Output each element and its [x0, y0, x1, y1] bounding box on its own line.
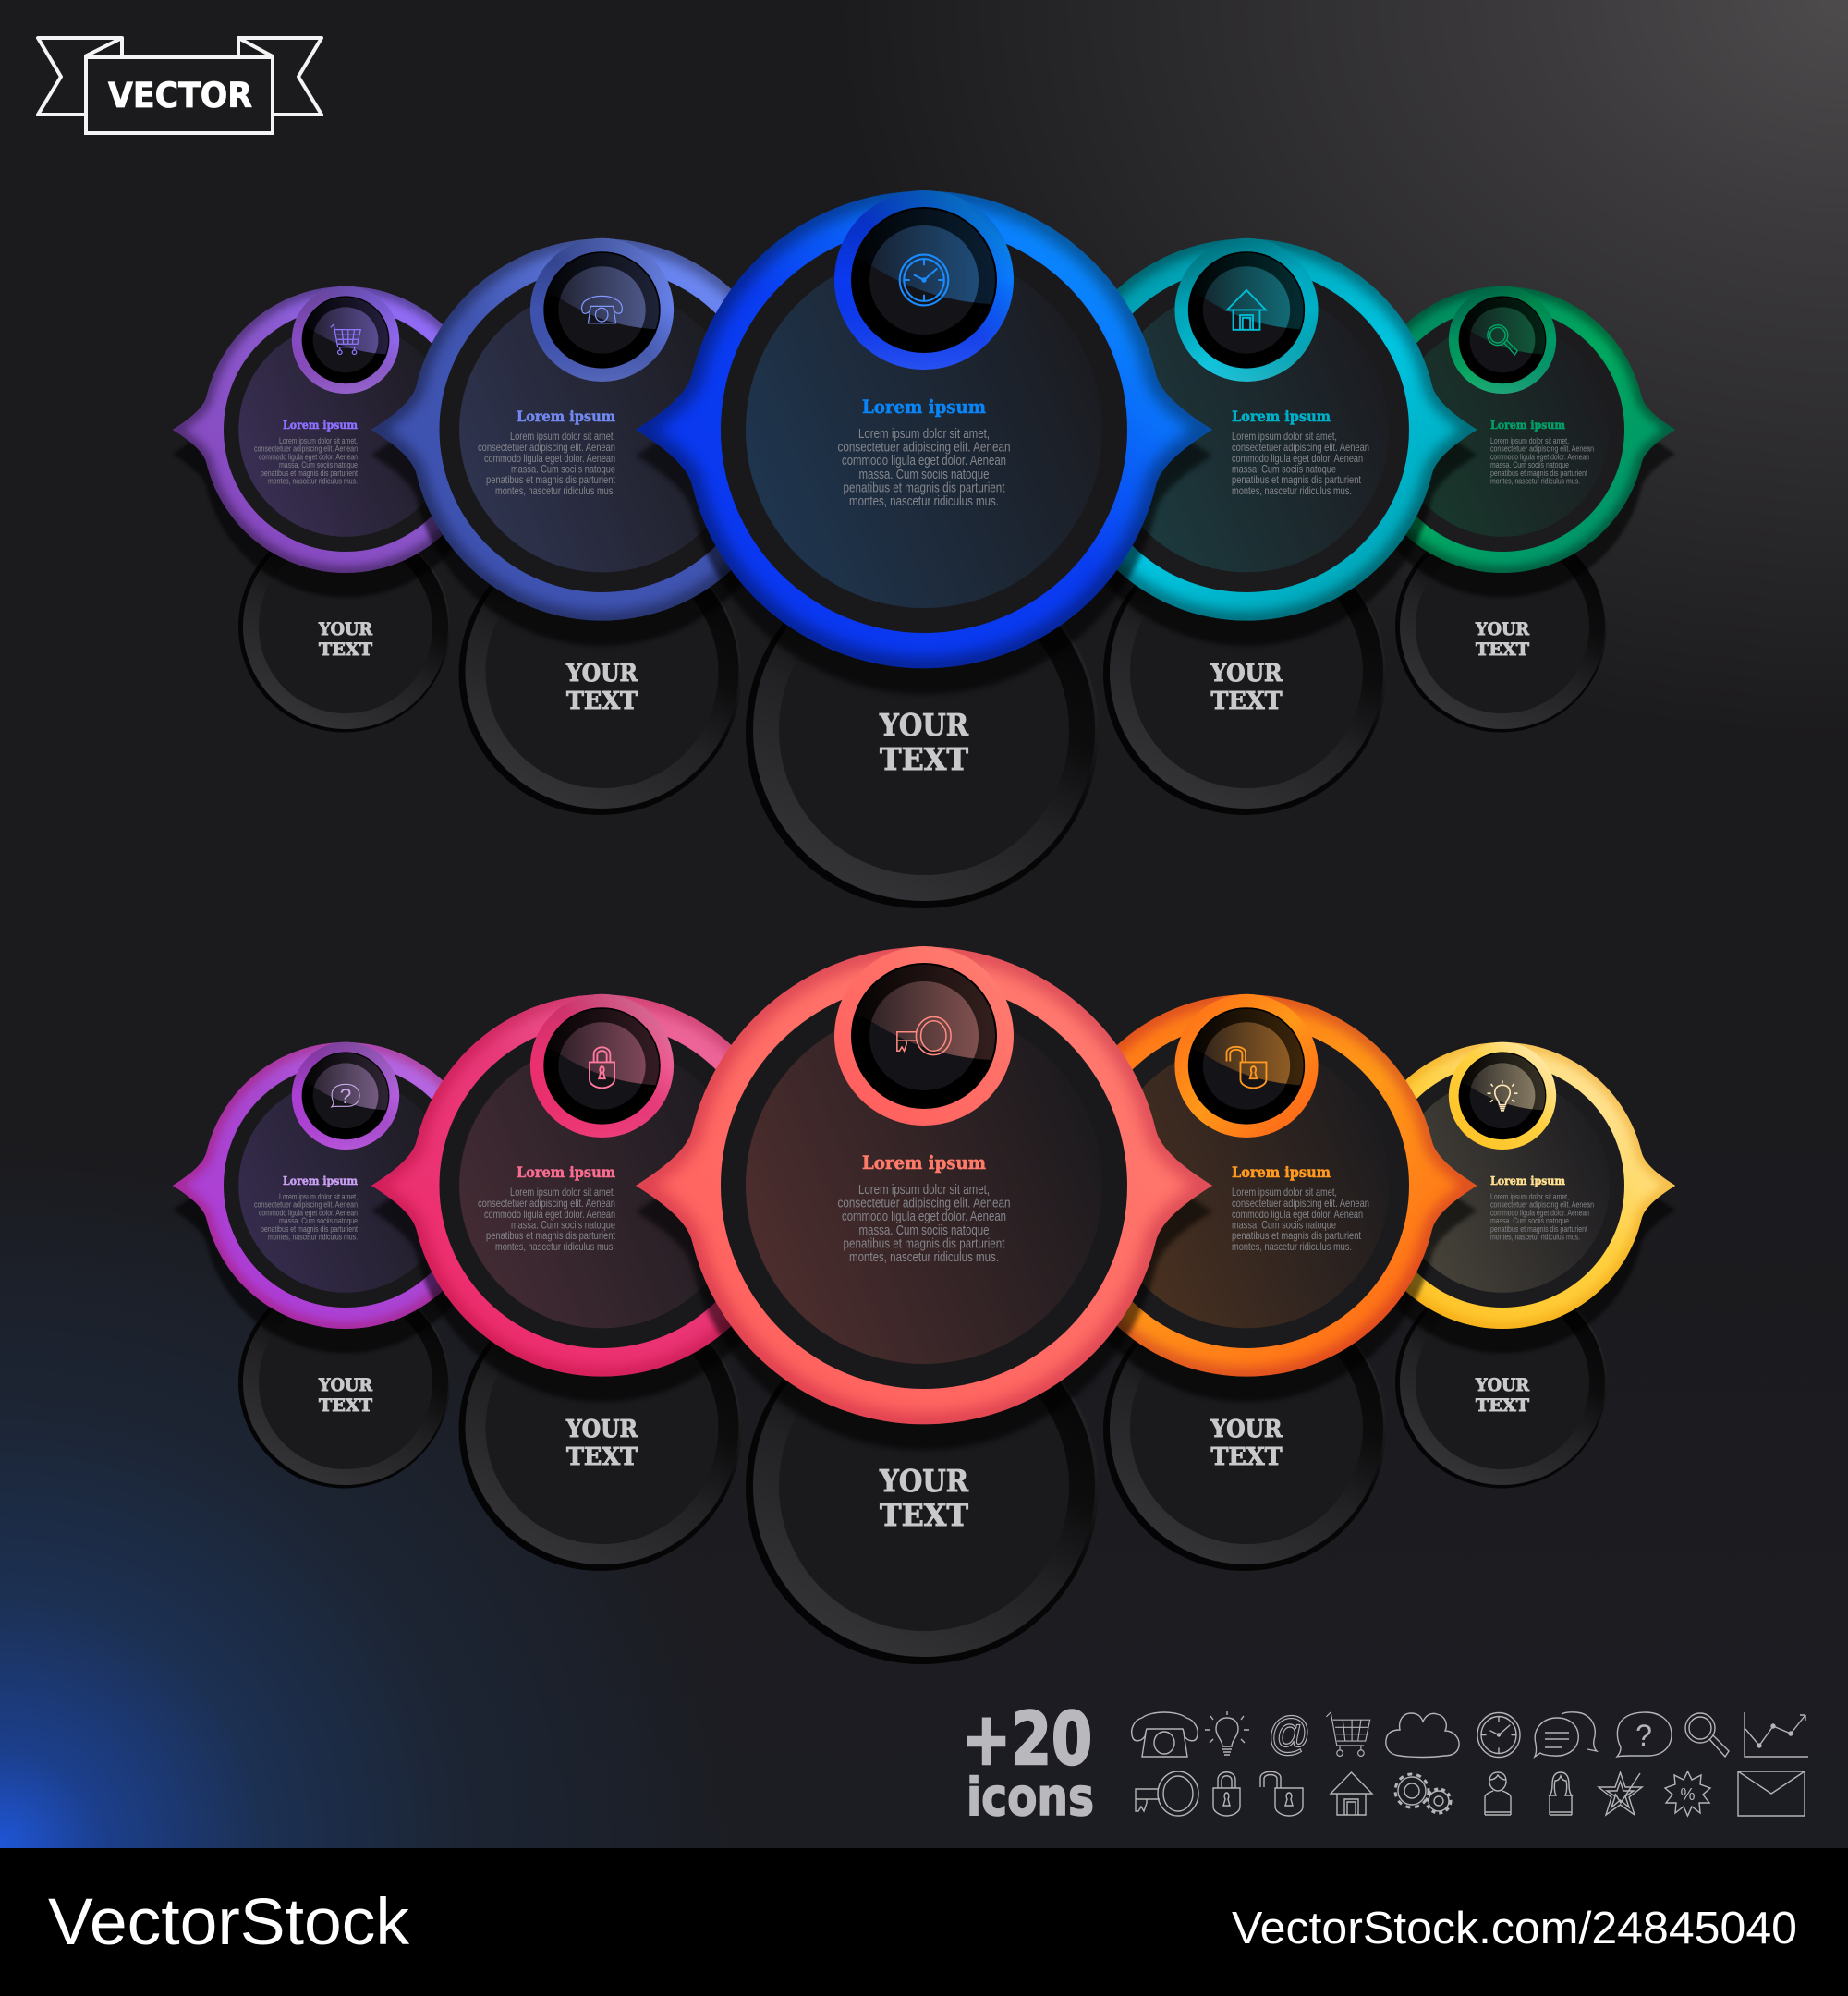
- text: violet: commodo ligula eget dolor. Aenean: [259, 1209, 358, 1218]
- text: violet: penatibus et magnis dis parturient: [261, 1224, 358, 1234]
- text: periwinkle: commodo ligula eget dolor. Aenean: [484, 452, 615, 465]
- text: teal: montes, nascetur ridiculus mus.: [1232, 484, 1352, 497]
- text: teal: consectetuer adipiscing elit. Aenean: [1232, 441, 1369, 454]
- text: violet: Lorem ipsum: [283, 1174, 358, 1187]
- text: teal: Lorem ipsum: [1232, 408, 1331, 425]
- icon: padlock: [529, 992, 676, 1138]
- icon: mail: [1738, 1771, 1805, 1816]
- text: orange: Lorem ipsum dolor sit amet,: [1232, 1186, 1337, 1199]
- icon: telephone: [1132, 1712, 1198, 1757]
- ring: periwinkle: [371, 238, 732, 645]
- lower disc: teal YOUR TEXT: YOUR: [1210, 660, 1283, 688]
- lower disc: coral YOUR TEXT: [746, 1311, 1099, 1664]
- text: coral: [837, 1151, 1011, 1265]
- icon: question bubble: [290, 1041, 401, 1150]
- footer bar: [0, 1848, 1848, 1996]
- text: pink: montes, nascetur ridiculus mus.: [495, 1240, 615, 1253]
- lower disc: purple YOUR TEXT: YOUR: [318, 619, 372, 639]
- lower disc: orange YOUR TEXT: [1103, 1288, 1386, 1571]
- text: violet: montes, nascetur ridiculus mus.: [268, 1233, 358, 1242]
- heading: +20 icons: +20: [962, 1698, 1092, 1782]
- text: green: [1490, 419, 1594, 486]
- ring: purple: [173, 286, 444, 597]
- unit: blue circle: [636, 188, 1212, 908]
- text: pink: Lorem ipsum dolor sit amet,: [510, 1186, 615, 1199]
- unit: orange circle: [1015, 992, 1477, 1571]
- text: orange: commodo ligula eget dolor. Aenean: [1232, 1208, 1363, 1221]
- icon: clock: [832, 188, 1016, 370]
- text: purple: consectetuer adipiscing elit. Aenean: [254, 444, 358, 453]
- icon: man: [1485, 1772, 1511, 1815]
- lower disc: blue YOUR TEXT: YOUR: [879, 707, 969, 743]
- text: blue: [837, 396, 1011, 509]
- text: orange: consectetuer adipiscing elit. Aenean: [1232, 1197, 1369, 1210]
- ring: yellow: [1330, 1041, 1675, 1353]
- icon: cloud: [1386, 1713, 1459, 1758]
- text: coral: penatibus et magnis dis parturient: [843, 1236, 1005, 1251]
- text: orange: [1232, 1163, 1369, 1253]
- text: blue: Lorem ipsum: [862, 396, 986, 418]
- text: purple: Lorem ipsum dolor sit amet,: [279, 436, 358, 445]
- icon: woman: [1550, 1772, 1572, 1815]
- icon: clock: [1477, 1713, 1520, 1758]
- text: periwinkle: consectetuer adipiscing elit. Aenean: [478, 441, 615, 454]
- icon: house: [1331, 1772, 1372, 1815]
- lower disc: green YOUR TEXT: [1395, 521, 1607, 732]
- text: green: montes, nascetur ridiculus mus.: [1490, 477, 1580, 486]
- text: pink: massa. Cum sociis natoque: [511, 1218, 615, 1231]
- icon: house: [1173, 236, 1320, 382]
- icon: percent badge: [1665, 1771, 1710, 1816]
- text: green: massa. Cum sociis natoque: [1490, 460, 1569, 469]
- icon: telephone: [529, 236, 676, 382]
- icon: light bulb: [1447, 1041, 1558, 1150]
- text: green: Lorem ipsum dolor sit amet,: [1490, 436, 1569, 445]
- text: pink: consectetuer adipiscing elit. Aenean: [478, 1197, 615, 1210]
- icon: star: [1599, 1772, 1642, 1815]
- ring: green: [1397, 286, 1675, 597]
- text: green: consectetuer adipiscing elit. Aenean: [1490, 444, 1594, 453]
- lower disc: blue YOUR TEXT: TEXT: [880, 741, 968, 777]
- text: green: commodo ligula eget dolor. Aenean: [1490, 453, 1589, 462]
- lower disc: coral YOUR TEXT: TEXT: [880, 1497, 968, 1533]
- text: purple: Lorem ipsum: [283, 419, 358, 432]
- footer: brand name: VectorStock: [48, 1886, 410, 1959]
- text: green: Lorem ipsum: [1490, 419, 1565, 432]
- text: purple: [254, 419, 358, 486]
- lower disc: yellow YOUR TEXT: [1395, 1277, 1607, 1488]
- lower disc: pink YOUR TEXT: YOUR: [565, 1416, 638, 1443]
- text: violet: [254, 1174, 358, 1242]
- lower disc: periwinkle YOUR TEXT: TEXT: [566, 688, 638, 715]
- lower disc: violet YOUR TEXT: [238, 1277, 450, 1488]
- ring: blue: [636, 188, 1212, 694]
- text: violet: massa. Cum sociis natoque: [279, 1216, 358, 1225]
- text: pink: commodo ligula eget dolor. Aenean: [484, 1208, 615, 1221]
- text: pink: [478, 1163, 616, 1253]
- ring: pink: [371, 992, 833, 1402]
- text: violet: consectetuer adipiscing elit. Aenean: [254, 1199, 358, 1209]
- icon: magnifier: [1685, 1713, 1729, 1757]
- lower disc: pink YOUR TEXT: TEXT: [566, 1443, 638, 1471]
- text: pink: penatibus et magnis dis parturient: [486, 1229, 616, 1242]
- text: orange: penatibus et magnis dis parturient: [1232, 1229, 1362, 1242]
- text: blue: commodo ligula eget dolor. Aenean: [842, 453, 1006, 469]
- lower disc: purple YOUR TEXT: [238, 521, 450, 732]
- text: yellow: penatibus et magnis dis parturient: [1490, 1224, 1587, 1234]
- text: pink: Lorem ipsum: [517, 1163, 615, 1181]
- text: periwinkle: Lorem ipsum: [517, 408, 615, 425]
- unit: yellow circle: [1330, 1041, 1675, 1488]
- unit: purple circle: [173, 286, 448, 732]
- icon: question bubble: [1617, 1712, 1672, 1757]
- lower disc: periwinkle YOUR TEXT: [458, 532, 741, 815]
- text: purple: commodo ligula eget dolor. Aenean: [259, 453, 358, 462]
- icon: key: [1136, 1771, 1198, 1816]
- text: coral: Lorem ipsum dolor sit amet,: [858, 1182, 990, 1198]
- ring: teal: [1116, 238, 1477, 645]
- text: purple: penatibus et magnis dis parturient: [261, 469, 358, 478]
- text: violet: Lorem ipsum dolor sit amet,: [279, 1192, 358, 1201]
- text: orange: Lorem ipsum: [1232, 1163, 1331, 1181]
- lower disc: teal YOUR TEXT: [1103, 532, 1386, 815]
- unit: coral circle: [636, 943, 1212, 1664]
- bottom row of circles: [173, 943, 1675, 1664]
- lower disc: violet YOUR TEXT: YOUR: [318, 1375, 372, 1395]
- badge: VECTOR ribbon: VECTOR: [108, 76, 252, 116]
- unit: teal circle: [1103, 238, 1477, 815]
- text: yellow: [1490, 1174, 1594, 1242]
- text: periwinkle: montes, nascetur ridiculus mus.: [495, 484, 615, 497]
- lower disc: orange YOUR TEXT: YOUR: [1210, 1416, 1283, 1443]
- icon: open padlock: [1173, 992, 1320, 1138]
- text: coral: massa. Cum sociis natoque: [859, 1223, 989, 1238]
- lower disc: yellow YOUR TEXT: YOUR: [1475, 1375, 1529, 1395]
- text: teal: Lorem ipsum dolor sit amet,: [1232, 430, 1337, 443]
- lower disc: orange YOUR TEXT: TEXT: [1210, 1443, 1283, 1471]
- icon: chat: [1535, 1712, 1597, 1757]
- icon: gears: [1395, 1774, 1451, 1813]
- icon: bulb: [1205, 1711, 1249, 1755]
- lower disc: periwinkle YOUR TEXT: YOUR: [565, 660, 638, 688]
- icon: cart: [290, 285, 401, 394]
- text: orange: montes, nascetur ridiculus mus.: [1232, 1240, 1352, 1253]
- unit: pink circle: [371, 992, 833, 1571]
- heading: +20 icons: [962, 1698, 1094, 1828]
- ring: coral: [636, 943, 1212, 1450]
- text: teal: penatibus et magnis dis parturient: [1232, 473, 1362, 486]
- text: coral: consectetuer adipiscing elit. Aenean: [837, 1196, 1011, 1211]
- text: yellow: massa. Cum sociis natoque: [1490, 1216, 1569, 1225]
- text: periwinkle: [478, 408, 616, 497]
- text: blue: Lorem ipsum dolor sit amet,: [858, 426, 990, 442]
- ring: orange: [1015, 992, 1477, 1402]
- unit: periwinkle circle: [371, 238, 739, 815]
- text: coral: montes, nascetur ridiculus mus.: [849, 1249, 999, 1265]
- lower disc: blue YOUR TEXT: [746, 555, 1099, 908]
- icon: open lock: [1260, 1771, 1303, 1816]
- badge: VECTOR ribbon: [38, 38, 322, 133]
- text: blue: massa. Cum sociis natoque: [859, 467, 989, 482]
- lower disc: purple YOUR TEXT: TEXT: [319, 639, 372, 660]
- text: teal: massa. Cum sociis natoque: [1232, 462, 1336, 475]
- lower disc: pink YOUR TEXT: [458, 1288, 741, 1571]
- footer: image url: VectorStock.com/24845040: [1232, 1904, 1797, 1953]
- icon: magnifier: [1447, 285, 1558, 394]
- text: blue: consectetuer adipiscing elit. Aenean: [837, 440, 1011, 455]
- icon: key: [832, 943, 1016, 1126]
- lower disc: green YOUR TEXT: TEXT: [1476, 639, 1529, 660]
- icon: chart: [1745, 1712, 1808, 1757]
- text: purple: massa. Cum sociis natoque: [279, 460, 358, 469]
- text: yellow: Lorem ipsum dolor sit amet,: [1490, 1192, 1569, 1201]
- lower disc: violet YOUR TEXT: TEXT: [319, 1395, 372, 1416]
- ring: violet: [173, 1041, 518, 1353]
- text: blue: penatibus et magnis dis parturient: [843, 481, 1005, 495]
- icon: at sign: @: [1268, 1708, 1311, 1759]
- text: blue: montes, nascetur ridiculus mus.: [849, 493, 999, 509]
- text: yellow: Lorem ipsum: [1490, 1174, 1565, 1187]
- text: yellow: consectetuer adipiscing elit. Aenean: [1490, 1199, 1594, 1209]
- lower disc: green YOUR TEXT: YOUR: [1475, 619, 1529, 639]
- text: purple: montes, nascetur ridiculus mus.: [268, 477, 358, 486]
- unit: violet circle: [173, 1041, 518, 1488]
- text: yellow: commodo ligula eget dolor. Aenean: [1490, 1209, 1589, 1218]
- text: orange: massa. Cum sociis natoque: [1232, 1218, 1336, 1231]
- icon: lock: [1213, 1772, 1240, 1816]
- icon: percent badge: %: [1680, 1785, 1696, 1804]
- top row of circles: [173, 188, 1675, 908]
- text: periwinkle: penatibus et magnis dis parturient: [486, 473, 616, 486]
- icon set: 20 outline icons: [1132, 1708, 1808, 1816]
- icon: question bubble: ?: [340, 1084, 351, 1108]
- text: periwinkle: Lorem ipsum dolor sit amet,: [510, 430, 615, 443]
- heading: +20 icons: icons: [967, 1768, 1094, 1828]
- lower disc: teal YOUR TEXT: TEXT: [1210, 688, 1283, 715]
- icon: question bubble: ?: [1635, 1719, 1652, 1752]
- text: periwinkle: massa. Cum sociis natoque: [511, 462, 615, 475]
- lower disc: coral YOUR TEXT: YOUR: [879, 1463, 969, 1499]
- unit: green circle: [1395, 286, 1675, 732]
- icon: cart: [1326, 1712, 1370, 1756]
- text: teal: commodo ligula eget dolor. Aenean: [1232, 452, 1363, 465]
- text: coral: commodo ligula eget dolor. Aenean: [842, 1209, 1006, 1224]
- text: coral: Lorem ipsum: [862, 1151, 986, 1174]
- lower disc: yellow YOUR TEXT: TEXT: [1476, 1395, 1529, 1416]
- text: green: penatibus et magnis dis parturient: [1490, 469, 1587, 478]
- text: teal: [1232, 408, 1369, 497]
- text: yellow: montes, nascetur ridiculus mus.: [1490, 1233, 1580, 1242]
